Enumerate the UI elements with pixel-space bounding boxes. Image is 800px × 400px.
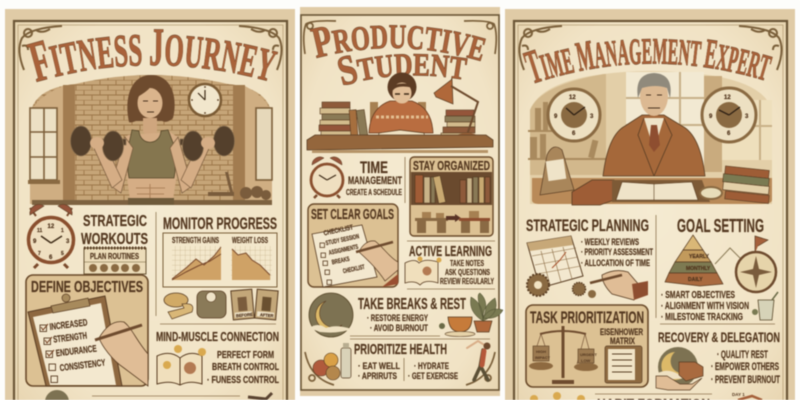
panel: define objectives bbox=[26, 275, 148, 386]
heading: strategic planning: STRATEGIC PLANNING bbox=[526, 216, 649, 235]
tea cup bbox=[439, 317, 475, 336]
notepad bbox=[605, 346, 642, 383]
corner ornaments bbox=[519, 26, 782, 70]
chart panel: strength gains and weight loss bbox=[163, 233, 277, 287]
wall clock left: 9 bbox=[554, 114, 558, 120]
open planner bbox=[612, 180, 710, 202]
list: health: · APRIRUTS bbox=[358, 371, 397, 381]
chart panel: strength gains and weight loss: WEIGHT LOSS bbox=[232, 236, 268, 245]
list: strategic planning: · ALLOCATION OF TIME bbox=[581, 258, 650, 269]
fruit and water bottle bbox=[313, 343, 351, 380]
panel: define objectives: DEFINE OBJECTIVES bbox=[31, 279, 143, 296]
left scale block bbox=[529, 346, 553, 370]
bottom row partial bbox=[45, 390, 272, 400]
list: mind-muscle points bbox=[207, 349, 279, 386]
list: take breaks bbox=[367, 313, 428, 333]
clipboard checklist: INCREASED bbox=[49, 317, 88, 333]
right dumbbell bbox=[180, 126, 234, 161]
wall clock left: 6 bbox=[572, 131, 576, 137]
writing hand bbox=[590, 271, 648, 300]
eisenhower matrix label: EISENHOWER bbox=[600, 327, 643, 337]
list: mind-muscle points: BREATH CONTROL bbox=[212, 361, 279, 373]
heading: monitor progress: MONITOR PROGRESS bbox=[163, 214, 277, 233]
list: recovery bbox=[711, 349, 780, 386]
pyramid of goals: MONTHLY bbox=[686, 266, 711, 272]
heading: strategic workouts bbox=[81, 213, 148, 248]
title bbox=[522, 38, 774, 84]
desk bbox=[532, 178, 772, 204]
checklist note: ASSIGNMENTS bbox=[328, 244, 359, 257]
poster: time management expert bbox=[504, 8, 796, 400]
heading: strategic workouts: WORKOUTS bbox=[81, 231, 148, 248]
open book icon bbox=[405, 256, 442, 285]
man in suit bbox=[603, 73, 705, 176]
heading: prioritize health: PRIORITIZE HEALTH bbox=[354, 341, 447, 358]
title: STUDENT bbox=[337, 53, 468, 86]
balance scale bbox=[533, 326, 593, 382]
alarm clock icon: 3 bbox=[66, 239, 70, 245]
clipboard checklist: STRENGTH bbox=[53, 331, 88, 346]
tape measure, scale and before/after photos: AFTER bbox=[260, 312, 274, 318]
list: goal setting bbox=[661, 289, 749, 323]
glass of water bbox=[752, 292, 778, 320]
desk bbox=[307, 135, 493, 150]
desk calendar bbox=[540, 147, 574, 195]
wall clock left: 12 bbox=[569, 95, 576, 101]
wall clock left bbox=[548, 89, 600, 141]
tape measure, scale and before/after photos bbox=[164, 289, 278, 320]
eisenhower matrix label bbox=[600, 327, 643, 346]
checklist note bbox=[312, 223, 377, 287]
checklist note: BREAKS bbox=[331, 256, 351, 266]
panel: task prioritization: TASK PRIORITIZATION bbox=[530, 308, 644, 327]
corner ornaments bbox=[19, 26, 282, 70]
bulbs and day tracker partial: DAY 1 bbox=[732, 392, 745, 397]
list: health: · EAT WELL bbox=[358, 361, 400, 371]
plan routines calendar bbox=[84, 248, 146, 274]
clipboard checklist: CONSISTENCY bbox=[59, 357, 107, 374]
list: strategic planning: · WEEKLY REVIEWS bbox=[581, 237, 639, 248]
list: goal setting: · ALIGNMENT WITH VISION bbox=[661, 300, 749, 312]
window bbox=[28, 108, 60, 184]
books left bbox=[319, 102, 368, 137]
right window bbox=[256, 108, 272, 180]
heading: take breaks and rest: TAKE BREAKS & REST bbox=[358, 296, 466, 313]
bookshelves bbox=[528, 102, 606, 160]
office scene illustration bbox=[528, 71, 772, 205]
title: PRODUCTIVE bbox=[309, 24, 486, 62]
moon, box and hand icon bbox=[656, 347, 703, 390]
wall clock right: 6 bbox=[727, 131, 731, 137]
list: active learning: TAKE NOTES bbox=[450, 259, 484, 268]
divider bbox=[155, 212, 157, 316]
writing hand bbox=[95, 322, 148, 386]
messy desk to tidy desk bbox=[415, 211, 490, 233]
list: active learning bbox=[440, 259, 494, 286]
list: strategic planning bbox=[581, 237, 653, 269]
panel: stay organized bbox=[410, 157, 493, 236]
panel: task prioritization bbox=[526, 305, 648, 387]
alarm clock icon bbox=[28, 204, 74, 268]
right scale block bbox=[574, 349, 598, 371]
wall clock right: 3 bbox=[745, 114, 749, 120]
alarm clock icon: 9 bbox=[33, 239, 37, 245]
alarm clock icon: 5 bbox=[61, 251, 64, 257]
list: health: · GET EXERCISE bbox=[408, 371, 458, 381]
list: mind-muscle points: · FUNESS CONTROL bbox=[207, 374, 279, 386]
calendar with gears icon bbox=[527, 236, 596, 298]
panel: set clear goals bbox=[308, 204, 398, 287]
alarm clock icon: 6 bbox=[49, 255, 53, 261]
potted plant bbox=[470, 293, 503, 332]
alarm clock icon: 12 bbox=[48, 224, 55, 230]
poster: productive student bbox=[299, 6, 504, 396]
list: active learning: REVIEW REGULARLY bbox=[440, 277, 494, 286]
title bbox=[26, 28, 279, 83]
wall clock left: 3 bbox=[590, 114, 594, 120]
title: TIME MANAGEMENT EXPERT bbox=[522, 38, 774, 84]
moon icon bbox=[309, 293, 353, 337]
time management block: TIME bbox=[360, 158, 388, 177]
clipboard checklist bbox=[28, 294, 122, 386]
checklist note: STUDY SESSION bbox=[325, 233, 360, 247]
books right bbox=[441, 110, 475, 138]
list: take breaks: · AVOID BURNOUT bbox=[370, 323, 428, 333]
alarm clock icon bbox=[311, 157, 343, 198]
wall clock right: 9 bbox=[709, 114, 713, 120]
corner ornaments bbox=[304, 21, 496, 385]
woman lifting dumbbells bbox=[70, 75, 234, 205]
list: active learning: ASK QUESTIONS bbox=[445, 268, 490, 277]
open book with bulbs icon bbox=[157, 345, 206, 385]
checklist note: CHECKLIST bbox=[323, 224, 354, 237]
left scale block: IMPACT bbox=[535, 355, 551, 360]
closed planner bbox=[572, 180, 614, 205]
stretching figure bbox=[467, 341, 490, 380]
list: strategic planning: · PRIORITY ASSESSMENT bbox=[581, 247, 653, 258]
wall clock right: 12 bbox=[724, 95, 731, 101]
time management block bbox=[346, 158, 402, 197]
student at desk illustration bbox=[307, 72, 493, 153]
tape measure, scale and before/after photos: BEFORE bbox=[236, 312, 253, 318]
panel: stay organized: STAY ORGANIZED bbox=[413, 158, 490, 173]
desk lamp bbox=[434, 78, 478, 139]
strength gains chart bbox=[172, 246, 221, 280]
poster: fitness journey bbox=[4, 8, 296, 400]
mountain flag and compass bbox=[715, 236, 776, 292]
wall clock right bbox=[702, 88, 756, 142]
time management block: MANAGEMENT bbox=[348, 175, 402, 187]
list: goal setting: · SMART OBJECTIVES bbox=[661, 289, 735, 301]
right scale block: LOW bbox=[581, 358, 591, 363]
wall clock bbox=[189, 84, 221, 116]
magnifier and books bbox=[700, 166, 769, 203]
heading: mind-muscle connection: MIND-MUSCLE CONNECTION bbox=[156, 329, 279, 344]
open book bbox=[378, 130, 425, 138]
pyramid of goals bbox=[665, 235, 723, 286]
pyramid of goals: YEARLY bbox=[689, 254, 709, 260]
bookshelf bbox=[411, 172, 492, 205]
clipboard checklist: ENDURANCE bbox=[55, 343, 97, 359]
list: goal setting: · MILESTONE TRACKING bbox=[661, 311, 743, 323]
stool and dumbbells bbox=[208, 172, 271, 200]
alarm clock icon: 7 bbox=[38, 251, 41, 257]
right scale block: URGENT bbox=[580, 352, 597, 357]
chart panel: strength gains and weight loss: STRENGTH GAINS bbox=[172, 236, 219, 245]
title: FITNESS JOURNEY bbox=[26, 28, 279, 83]
checklist note: CHECKLIST bbox=[342, 264, 365, 275]
alarm clock icon: 11 bbox=[37, 228, 43, 234]
bulbs and day tracker partial bbox=[530, 392, 762, 400]
list: health bbox=[358, 358, 458, 381]
list: mind-muscle points: PERFECT FORM bbox=[217, 349, 274, 361]
writing hand bbox=[356, 241, 398, 287]
heading: strategic workouts: STRATEGIC bbox=[83, 213, 147, 230]
plan routines calendar: PLAN ROUTINES bbox=[90, 251, 139, 261]
panel: set clear goals: SET CLEAR GOALS bbox=[311, 207, 394, 223]
pyramid of goals: DAILY bbox=[688, 277, 703, 283]
left dumbbell bbox=[70, 126, 126, 161]
gym scene illustration bbox=[28, 75, 272, 205]
heading: habit formation bbox=[595, 394, 712, 400]
alarm clock icon: 1 bbox=[61, 228, 64, 234]
eisenhower matrix label: MATRIX bbox=[610, 336, 635, 346]
title bbox=[309, 24, 486, 86]
heading: active learning: ACTIVE LEARNING bbox=[409, 244, 492, 260]
list: take breaks: · RESTORE ENERGY bbox=[367, 313, 428, 323]
list: health: · HYDRATE bbox=[414, 361, 449, 371]
left scale block: HIGH bbox=[536, 349, 546, 354]
weight loss chart bbox=[231, 246, 272, 280]
window bbox=[626, 72, 772, 172]
time management block: CREATE A SCHEDULE bbox=[346, 188, 402, 197]
